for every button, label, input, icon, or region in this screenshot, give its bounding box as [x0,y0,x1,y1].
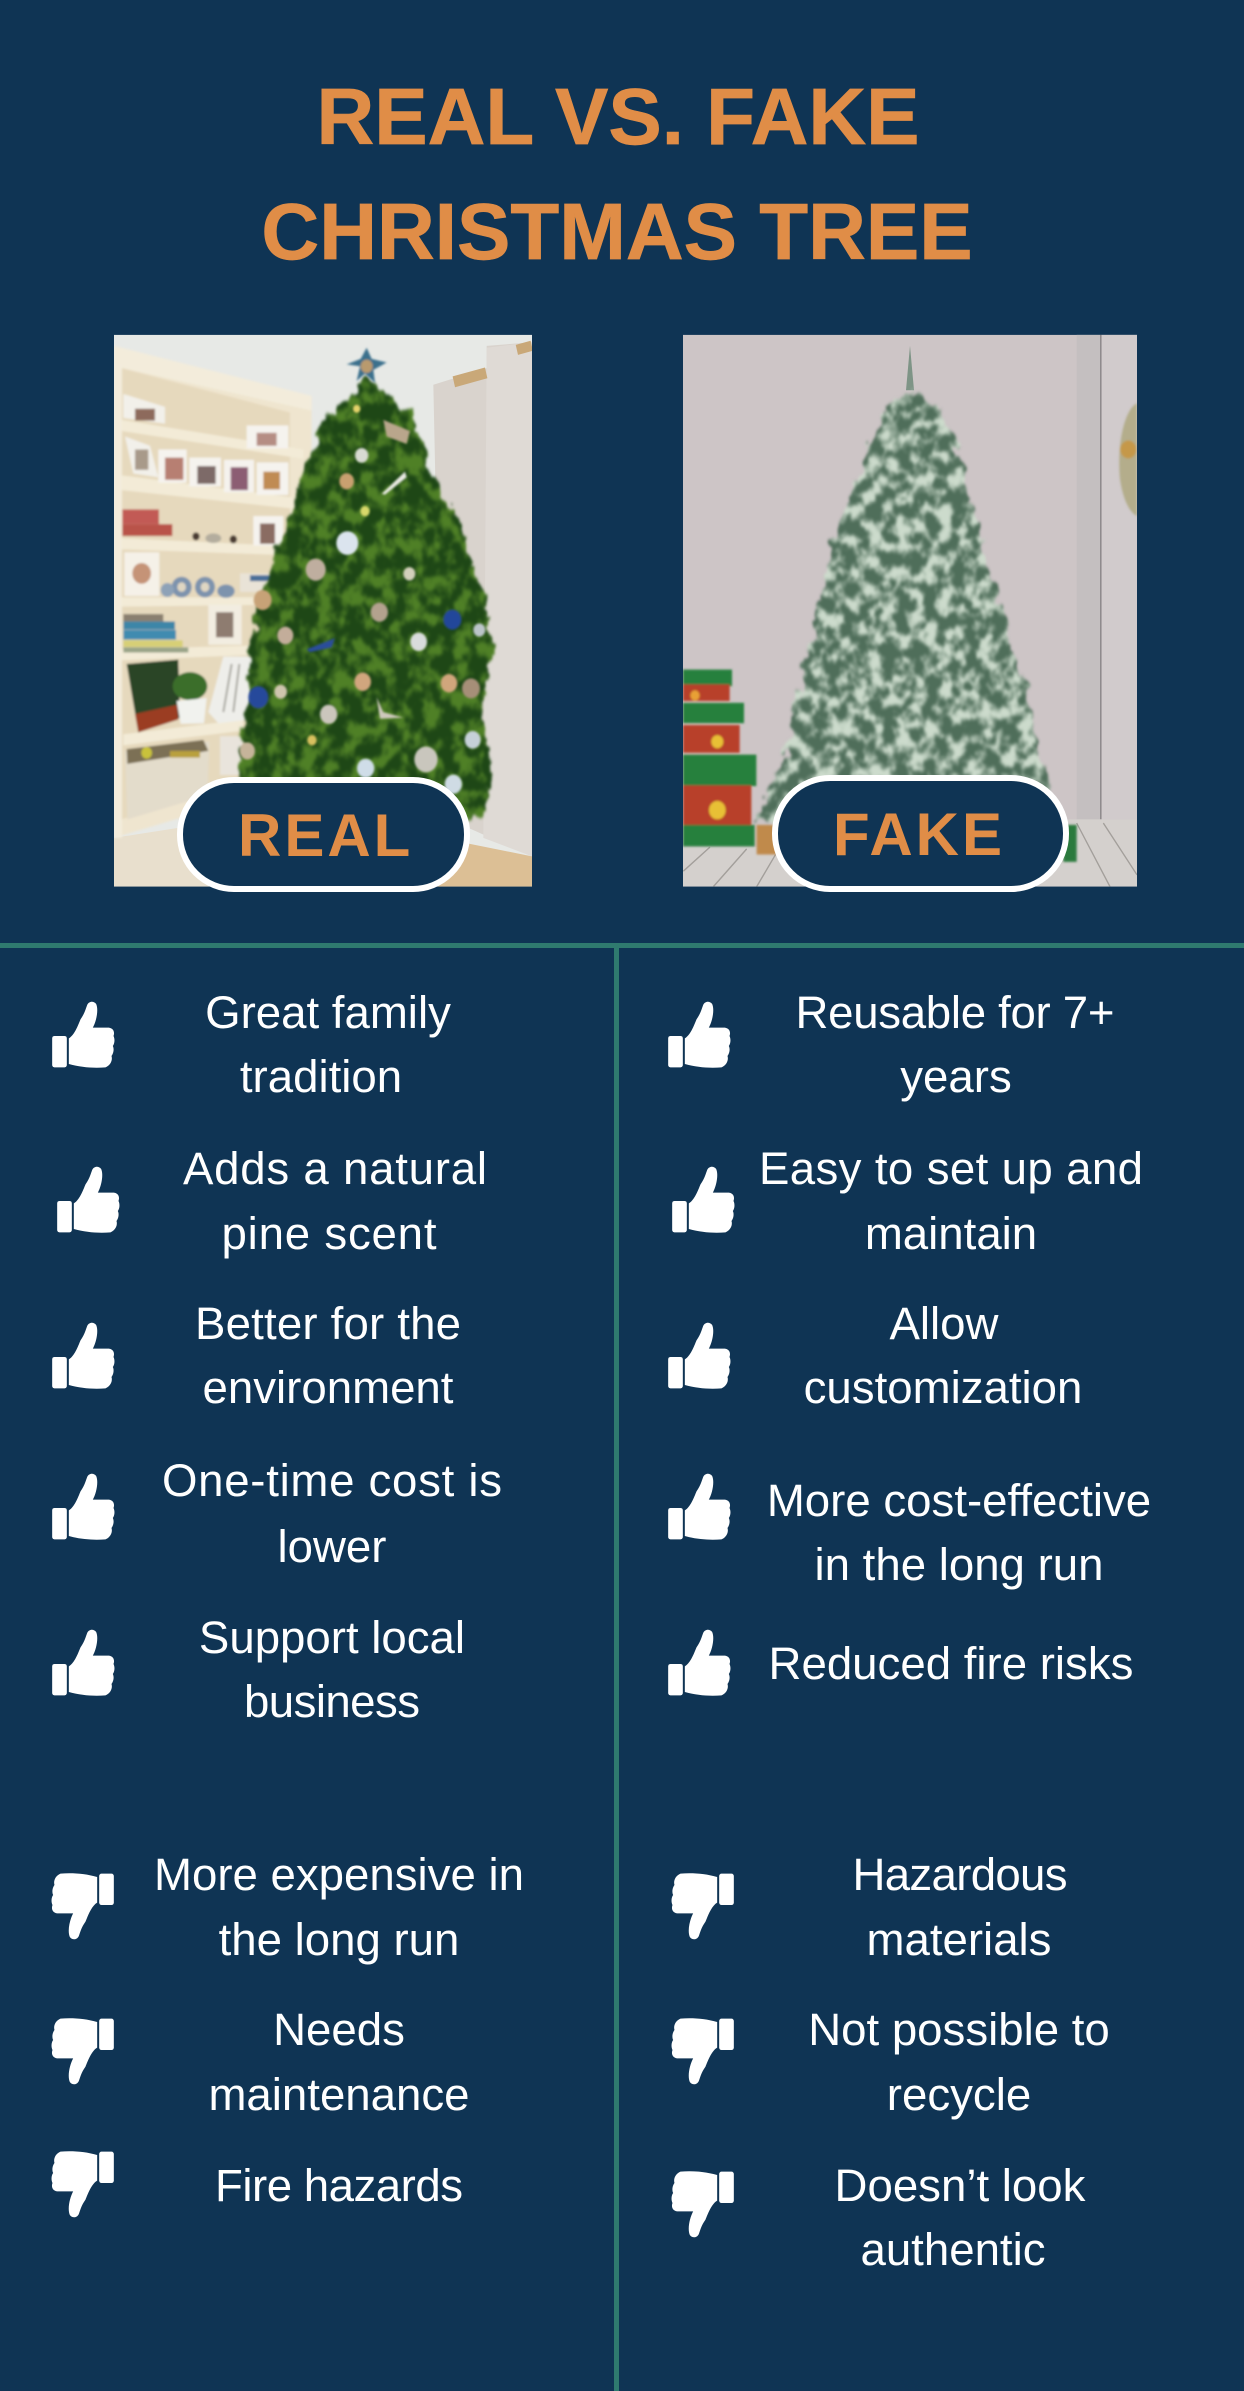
con: maintenance: Needs [273,2004,405,2055]
pro: tradition: tradition [240,1051,402,1102]
label pill: fake [775,778,1066,889]
pro: environment [195,1298,461,1413]
con: authenticity: authentic [860,2224,1046,2275]
pro: easy: maintain [865,1208,1037,1259]
pro: scent: Adds a natural [183,1143,487,1194]
con: maintenance: maintenance [208,2069,470,2120]
con: hazardous [852,1849,1068,1965]
label pill: real: REAL [238,802,413,869]
icon: thumbs up [672,1167,734,1233]
pro: tradition [205,987,451,1102]
horizontal divider [0,943,1244,948]
icon: thumbs up [668,1002,730,1068]
pro: cost: One-time cost is [162,1455,502,1506]
pro: local business: business [244,1676,420,1727]
icon: thumbs up [668,1323,730,1389]
pro: easy [759,1143,1143,1259]
vertical divider [614,945,619,2391]
con: hazardous: Hazardous [852,1849,1068,1900]
icon: thumbs up [52,1474,114,1540]
pro: scent: pine scent [222,1208,437,1259]
pro: tradition: Great family [205,987,451,1038]
pro: customization: Allow [890,1298,1000,1349]
con: expensive: More expensive in [154,1849,524,1900]
pro: cost: lower [278,1521,386,1572]
icon: thumbs up [668,1630,730,1696]
label pill: real [180,780,467,889]
pro: reusable: years [900,1051,1012,1102]
con: hazardous: materials [867,1914,1051,1965]
fake pros [668,987,1151,1696]
pro: customization [804,1298,1082,1413]
photo: real christmas tree [114,334,532,887]
icon: thumbs down [672,2171,734,2237]
icon: thumbs down [52,1873,114,1939]
pro: cost-effective [767,1475,1151,1590]
title [261,72,973,276]
pro: environment: environment [203,1362,454,1413]
pro: cost-effective: More cost-effective [767,1475,1151,1526]
icon: thumbs up [52,1002,114,1068]
con: authenticity: Doesn’t look [835,2160,1086,2211]
icon: thumbs up [668,1474,730,1540]
con: recycle: recycle [887,2069,1031,2120]
icon: thumbs down [672,1873,734,1939]
pro: local business [199,1612,465,1727]
con: maintenance [208,2004,470,2120]
fake cons [672,1849,1110,2275]
pro: easy: Easy to set up and [759,1143,1143,1194]
real pros [52,987,502,1727]
con: expensive: the long run [219,1914,459,1965]
icon: thumbs up [52,1323,114,1389]
icon: thumbs down [52,2151,114,2217]
con: authenticity [835,2160,1086,2275]
pro: reusable [796,987,1114,1102]
icon: thumbs down [52,2018,114,2084]
icon: thumbs up [52,1630,114,1696]
pro: customization: customization [804,1362,1082,1413]
real cons [52,1849,524,2217]
con: recycle: Not possible to [808,2004,1110,2055]
pro: fire risk: Reduced fire risks [769,1638,1133,1689]
pro: environment: Better for the [195,1298,461,1349]
con: recycle [808,2004,1110,2120]
pro: cost-effective: in the long run [815,1539,1103,1590]
title: REAL VS. FAKE [316,72,920,161]
pro: scent [183,1143,487,1259]
pro: cost [162,1455,502,1572]
con: fire hazards: Fire hazards [215,2160,463,2211]
con: expensive [154,1849,524,1965]
photo: fake christmas tree [683,334,1137,887]
title: CHRISTMAS TREE [261,187,973,276]
icon: thumbs down [672,2018,734,2084]
icon: thumbs up [57,1167,119,1233]
pro: reusable: Reusable for 7+ [796,987,1114,1038]
label pill: fake: FAKE [833,801,1005,868]
pro: local business: Support local [199,1612,465,1663]
